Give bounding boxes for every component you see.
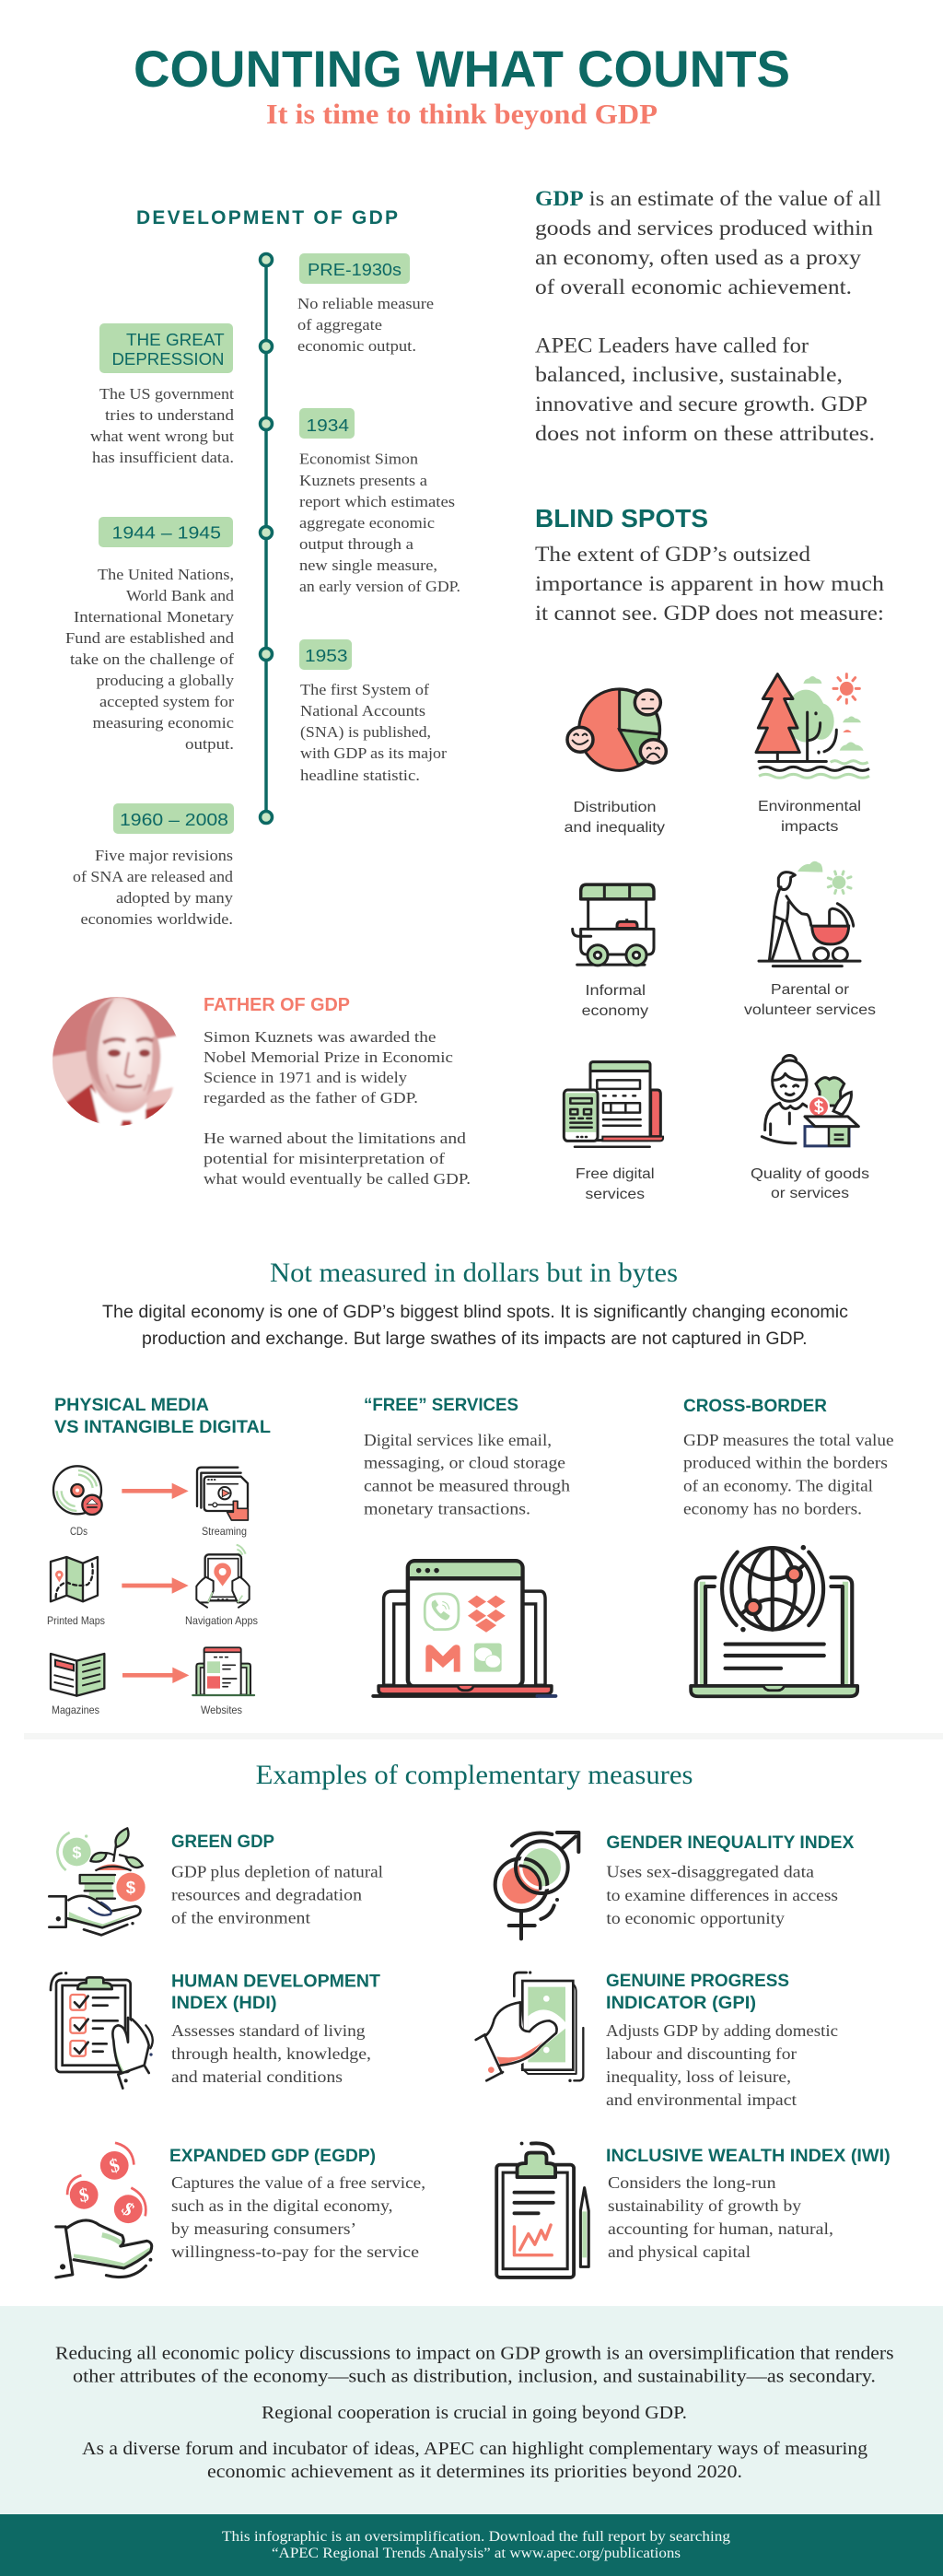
entry: 1934: aggregate economic (299, 514, 435, 532)
entry: 1944-1945: 1944 – 1945 (112, 523, 221, 543)
label: quality: Quality of goods (751, 1166, 869, 1182)
measure: GPI: GENUINE PROGRESS (606, 1972, 789, 1991)
entry: pre-1930s: of aggregate (297, 316, 382, 334)
label: parental: Parental or (771, 982, 850, 998)
icon: EGDP hand with coins: $ (108, 2155, 122, 2177)
panel: conclusion: other attributes of the economy—such as distribution, inclusion, and sustainability—as secondary. (73, 2368, 876, 2387)
panel: GDP definition text: innovative and secure growth. GDP (535, 392, 867, 416)
column: free services: monetary transactions. (364, 1500, 530, 1518)
measure: GPI (606, 1972, 838, 2109)
measure: HDI (171, 1972, 380, 2086)
label: quality: or services (771, 1186, 849, 1201)
column: physical media (47, 1396, 271, 1716)
arrow 2 (122, 1581, 183, 1590)
icon: distribution pie (567, 689, 666, 770)
measure: EGDP: Captures the value of a free service, (171, 2173, 425, 2192)
label: quality (751, 1166, 869, 1201)
panel: GDP definition text: APEC Leaders have called for (535, 334, 809, 357)
small labels: Magazines (52, 1704, 99, 1716)
icon: CD (53, 1466, 102, 1515)
entry: 1944-1945: take on the challenge of (70, 650, 235, 668)
entry: 1934: 1934 (306, 416, 349, 435)
column: free services: messaging, or cloud storage (364, 1454, 565, 1472)
entry: 1934: Economist Simon (299, 450, 418, 468)
small labels: CDs (70, 1525, 87, 1538)
icon: green GDP (49, 1828, 146, 1935)
entry: pre-1930s: PRE-1930s (308, 260, 402, 279)
measure: IWI: sustainability of growth by (608, 2196, 801, 2215)
measure: IWI: accounting for human, natural, (608, 2219, 833, 2238)
measure: GPI: and environmental impact (606, 2090, 797, 2109)
panel: conclusion: Regional cooperation is crucial in going beyond GDP. (262, 2404, 687, 2423)
entry: 1944-1945: measuring economic (92, 714, 234, 732)
panel: blind spots (535, 504, 885, 1202)
entry: 1934: Kuznets presents a (299, 472, 428, 489)
entry: the great depression: DEPRESSION (112, 349, 225, 369)
measure: IWI: Considers the long-run (608, 2173, 776, 2192)
measure: HDI: and material conditions (171, 2067, 343, 2086)
measure: green GDP: resources and degradation (171, 1885, 362, 1903)
entry: 1960-2008: of SNA are released and (73, 868, 234, 885)
panel: conclusion: economic achievement as it determines its priorities beyond 2020. (207, 2463, 742, 2482)
panel: digital economy (47, 1258, 894, 1716)
blind spots heading: BLIND SPOTS (535, 504, 708, 533)
icon: free digital services (564, 1062, 663, 1147)
icon: food cart (573, 884, 654, 966)
measure: EGDP (169, 2147, 425, 2261)
measure: gender inequality (606, 1833, 855, 1927)
column: physical media: VS INTANGIBLE DIGITAL (54, 1418, 271, 1437)
measure: green GDP (171, 1832, 383, 1927)
entry: 1944-1945: World Bank and (126, 587, 235, 604)
icon: laptop with globe (691, 1545, 857, 1696)
icon row: physical to digital (51, 1466, 254, 1696)
footer: This infographic is an oversimplification. Download the full report by searching (222, 2529, 730, 2545)
measure: HDI: Assesses standard of living (171, 2021, 365, 2040)
icon: parent with stroller (759, 861, 860, 966)
label: environmental: impacts (781, 819, 838, 835)
entry: 1953: 1953 (305, 646, 348, 665)
entry: 1944-1945: accepted system for (99, 693, 235, 710)
icon: gender symbols (495, 1832, 578, 1938)
entry: 1944-1945: International Monetary (74, 608, 235, 626)
entry: 1944-1945: Fund are established and (65, 629, 235, 647)
panel: complementary measures (49, 1760, 891, 2277)
panel: father of GDP (46, 986, 471, 1188)
father text: Simon Kuznets was awarded the (204, 1028, 437, 1046)
entry: pre-1930s (297, 253, 434, 355)
icon: printed map (51, 1557, 98, 1601)
column: free services: cannot be measured through (364, 1477, 570, 1495)
icon: website (192, 1647, 254, 1695)
column: cross-border: CROSS-BORDER (683, 1397, 827, 1416)
entry: 1934: output through a (299, 535, 414, 553)
entry: the great depression (90, 323, 235, 466)
panel: conclusion: Reducing all economic policy discussions to impact on GDP growth is an oversimplification that renders (55, 2345, 894, 2364)
father text: what would eventually be called GDP. (204, 1170, 471, 1188)
measure: GPI: labour and discounting for (606, 2044, 797, 2063)
label: environmental: Environmental (758, 799, 861, 814)
icon: magazine (51, 1654, 104, 1696)
father text: potential for misinterpretation of (204, 1150, 446, 1167)
column: cross-border: economy has no borders. (683, 1500, 862, 1518)
column: free services: “FREE” SERVICES (364, 1396, 518, 1415)
icon: green GDP: $ (126, 1878, 136, 1897)
entry: the great depression: The US government (99, 385, 234, 403)
divider band (24, 1733, 943, 1739)
panel: GDP definition text: GDP is an estimate of the value of all (535, 187, 881, 210)
portrait of Simon Kuznets (52, 997, 177, 1126)
entry: the great depression: has insufficient data. (92, 449, 234, 466)
label: parental (744, 982, 876, 1018)
label: distribution: Distribution (573, 800, 656, 815)
measure: HDI: through health, knowledge, (171, 2044, 371, 2063)
icon: green GDP: $ (72, 1843, 81, 1861)
label: informal economy (582, 983, 648, 1019)
entry: 1944-1945: producing a globally (96, 672, 235, 689)
entry: the great depression: tries to understand (105, 406, 235, 424)
measure: HDI: INDEX (HDI) (171, 1994, 276, 2013)
column: cross-border: of an economy. The digital (683, 1477, 873, 1495)
entry: 1944-1945: The United Nations, (98, 566, 234, 583)
label: free digital (576, 1166, 655, 1202)
entry: 1934 (299, 408, 460, 595)
column: free services: Digital services like email, (364, 1431, 552, 1449)
panel: GDP definition text: an economy, often used as a proxy (535, 246, 862, 269)
entry: 1960-2008 (73, 803, 234, 928)
footer: “APEC Regional Trends Analysis” at www.apec.org/publications (272, 2546, 681, 2561)
label: distribution (565, 800, 665, 836)
column: physical media: PHYSICAL MEDIA (54, 1396, 209, 1415)
small labels: Websites (201, 1704, 242, 1716)
small labels: Printed Maps (47, 1614, 105, 1627)
subtitle: It is time to think beyond GDP (266, 98, 658, 130)
measure: IWI: INCLUSIVE WEALTH INDEX (IWI) (606, 2147, 891, 2166)
measure: HDI: HUMAN DEVELOPMENT (171, 1972, 380, 1991)
entry: the great depression: THE GREAT (126, 330, 225, 349)
digital intro: production and exchange. But large swathes of its impacts are not captured in GDP. (142, 1329, 807, 1349)
digital intro (102, 1302, 848, 1349)
icon: IWI clipboard (496, 2142, 588, 2277)
entry: 1934: new single measure, (299, 556, 437, 574)
label: free digital: services (586, 1187, 645, 1202)
measures heading: Examples of complementary measures (256, 1760, 693, 1790)
icon: environment (756, 674, 869, 778)
arrow 3 (122, 1670, 184, 1680)
panel: conclusion (0, 2306, 943, 2514)
entry: 1960-2008: Five major revisions (95, 847, 233, 864)
label: informal economy: Informal (586, 983, 646, 999)
blind spots intro (535, 543, 885, 625)
footer (0, 2514, 943, 2576)
digital heading: Not measured in dollars but in bytes (270, 1258, 678, 1288)
icon: navigation app (196, 1545, 250, 1608)
measure: GPI: INDICATOR (GPI) (606, 1994, 756, 2013)
panel: GDP definition text (535, 187, 881, 445)
entry: 1944-1945 (65, 517, 235, 753)
blind spots intro: The extent of GDP’s outsized (535, 543, 811, 566)
entry: pre-1930s: economic output. (297, 337, 416, 355)
measure: gender inequality: GENDER INEQUALITY INDEX (606, 1833, 855, 1853)
timeline axis (260, 254, 273, 824)
arrow 1 (122, 1486, 183, 1495)
entry: pre-1930s: No reliable measure (297, 295, 434, 312)
entry: the great depression: what went wrong but (90, 427, 234, 445)
entry: 1944-1945: output. (185, 735, 234, 753)
column: cross-border: GDP measures the total value (683, 1431, 894, 1449)
entry: 1934: an early version of GDP. (299, 578, 460, 595)
label: parental: volunteer services (744, 1002, 876, 1018)
digital intro: The digital economy is one of GDP’s biggest blind spots. It is significantly changing economic (102, 1302, 848, 1322)
father text (204, 1028, 471, 1188)
icon: streaming (197, 1468, 248, 1520)
measure: IWI: and physical capital (608, 2242, 751, 2261)
icon: laptop with free apps (373, 1561, 555, 1696)
measure: green GDP: GDP plus depletion of natural (171, 1863, 383, 1881)
entry: 1953: (SNA) is published, (300, 723, 431, 741)
icon: GPI hand with banknote (476, 1971, 583, 2082)
father text: Science in 1971 and is widely (204, 1069, 408, 1086)
blind spots intro: it cannot see. GDP does not measure: (535, 602, 884, 625)
blind spots intro: importance is apparent in how much (535, 572, 885, 595)
column: cross-border (683, 1397, 894, 1518)
label: distribution: and inequality (565, 820, 665, 836)
measure: green GDP: of the environment (171, 1909, 310, 1927)
measure: GPI: Adjusts GDP by adding domestic (606, 2021, 838, 2040)
measure: EGDP: such as in the digital economy, (171, 2196, 392, 2215)
icon: quality of goods (762, 1056, 858, 1146)
label: free digital: Free digital (576, 1166, 655, 1182)
icon: EGDP hand with coins (56, 2143, 152, 2277)
entry: 1953: with GDP as its major (300, 744, 448, 762)
measure: green GDP: GREEN GDP (171, 1832, 274, 1852)
small labels: Navigation Apps (185, 1614, 258, 1627)
father text: He warned about the limitations and (204, 1130, 467, 1147)
entry: 1953: National Accounts (300, 702, 425, 720)
father text: regarded as the father of GDP. (204, 1089, 418, 1107)
column: free services (364, 1396, 570, 1518)
measure: gender inequality: Uses sex-disaggregated data (606, 1863, 814, 1881)
measure: EGDP: by measuring consumers’ (171, 2219, 356, 2238)
column: cross-border: produced within the borders (683, 1454, 888, 1472)
father heading: FATHER OF GDP (204, 995, 350, 1015)
measure: gender inequality: to economic opportunity (606, 1909, 785, 1927)
panel: GDP definition text: goods and services produced within (535, 217, 874, 240)
entry: 1934: report which estimates (299, 493, 455, 510)
panel: GDP definition text: balanced, inclusive, sustainable, (535, 363, 843, 386)
entry: 1953 (299, 639, 448, 784)
icon: EGDP hand with coins: $ (118, 2199, 138, 2220)
entry: 1960-2008: 1960 – 2008 (120, 810, 228, 829)
measure: EGDP: EXPANDED GDP (EGDP) (169, 2147, 376, 2166)
label: informal economy: economy (582, 1003, 648, 1019)
measure: GPI: inequality, loss of leisure, (606, 2067, 791, 2086)
small labels (47, 1525, 258, 1716)
father text: Nobel Memorial Prize in Economic (204, 1048, 453, 1066)
label: environmental (758, 799, 861, 835)
panel: GDP definition text: of overall economic achievement. (535, 275, 852, 299)
entry: 1960-2008: adopted by many (116, 889, 234, 907)
panel: conclusion: As a diverse forum and incubator of ideas, APEC can highlight complementary ways of measuring (82, 2440, 867, 2459)
measure: EGDP: willingness-to-pay for the service (171, 2242, 419, 2261)
panel: development of GDP timeline (65, 207, 460, 928)
small labels: Streaming (202, 1525, 247, 1538)
timeline heading: DEVELOPMENT OF GDP (136, 207, 398, 228)
measure: IWI (606, 2147, 891, 2261)
panel: GDP definition text: does not inform on these attributes. (535, 422, 875, 445)
title: COUNTING WHAT COUNTS (134, 40, 790, 98)
entry: 1953: The first System of (300, 681, 430, 698)
entry: 1953: headline statistic. (300, 767, 420, 784)
icon: EGDP hand with coins: $ (77, 2184, 90, 2207)
measure: gender inequality: to examine differences in access (606, 1886, 838, 1904)
entry: 1960-2008: economies worldwide. (81, 910, 233, 928)
icon: HDI clipboard (51, 1972, 153, 2089)
